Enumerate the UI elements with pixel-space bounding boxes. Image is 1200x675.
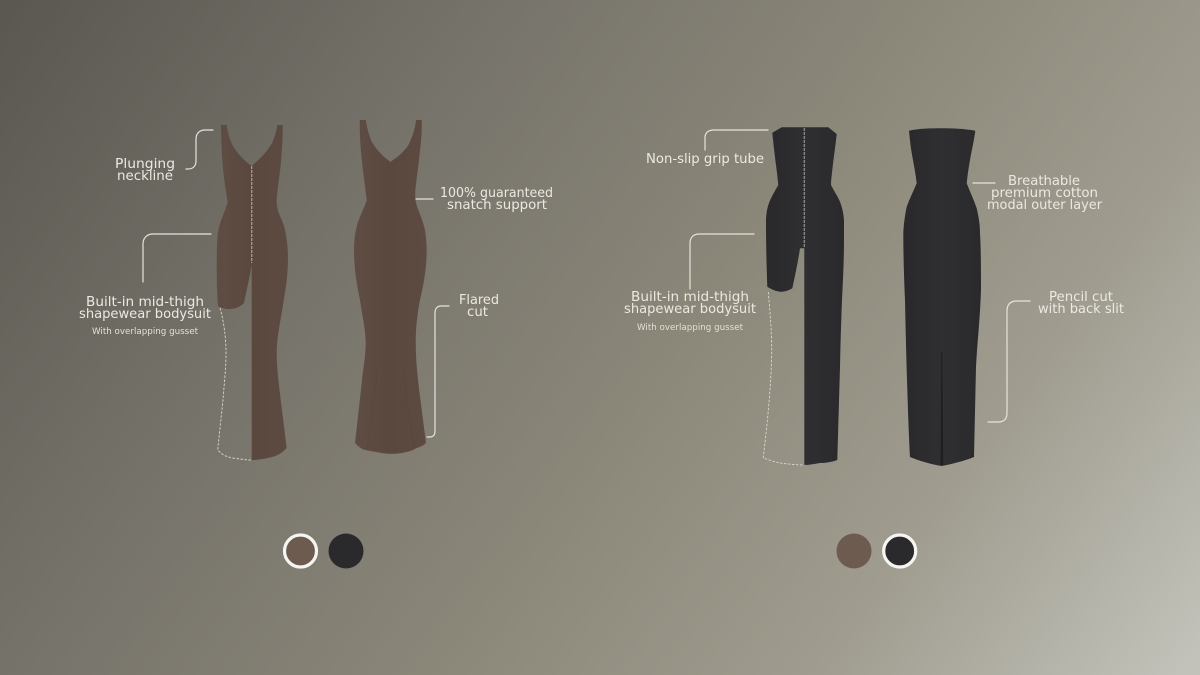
label: pencil cut: with back slit — [1038, 302, 1124, 317]
panel: pencil dress front — [624, 127, 844, 465]
label: flared cut: cut — [467, 305, 488, 320]
garment: brown dress back — [354, 120, 427, 454]
label: flared cut: Flared — [459, 293, 499, 308]
label: plunging neckline: neckline — [117, 169, 173, 184]
garment: black dress back — [903, 128, 981, 466]
garment: black dress front cutaway — [763, 127, 844, 465]
label: breathable outer layer: modal outer layer — [987, 198, 1102, 213]
label: snatch support — [416, 186, 553, 213]
label: breathable outer layer: premium cotton — [991, 186, 1098, 201]
detail: back slit — [941, 352, 943, 465]
label: flared cut — [427, 293, 499, 437]
outline: dashed lower leg — [763, 292, 804, 465]
panel: pencil dress back view — [903, 128, 1124, 466]
label: built-in bodysuit — [624, 234, 756, 333]
label: non-slip grip tube — [646, 130, 768, 167]
label: plunging neckline: Plunging — [115, 157, 175, 172]
label: built-in bodysuit: With overlapping gusset — [637, 323, 744, 333]
panel: flared dress back view — [354, 120, 553, 454]
garment: brown dress front cutaway — [217, 125, 288, 460]
label: snatch support: snatch support — [447, 198, 547, 213]
panel: flared dress — [79, 125, 288, 460]
label: built-in bodysuit: With overlapping gusset — [92, 327, 199, 337]
label: snatch support: 100% guaranteed — [440, 186, 553, 201]
label: built-in bodysuit: shapewear bodysuit — [79, 307, 211, 322]
label: breathable outer layer — [973, 174, 1102, 213]
colour swatches: flared dress — [284, 534, 364, 568]
label: non-slip grip tube: Non-slip grip tube — [646, 152, 764, 167]
label: built-in bodysuit: Built-in mid-thigh — [86, 295, 204, 310]
label: breathable outer layer: Breathable — [1008, 174, 1080, 189]
outline: dashed lower leg — [218, 308, 252, 460]
seam: front stitching — [251, 166, 253, 263]
label: built-in bodysuit: Built-in mid-thigh — [631, 290, 749, 305]
colour swatches: pencil dress — [836, 534, 916, 568]
label: pencil cut: Pencil cut — [1049, 290, 1113, 305]
label: plunging neckline — [115, 130, 213, 184]
label: built-in bodysuit: shapewear bodysuit — [624, 302, 756, 317]
label: pencil cut — [988, 290, 1124, 422]
seam: front stitching — [803, 128, 805, 247]
label: built-in bodysuit — [79, 234, 211, 337]
